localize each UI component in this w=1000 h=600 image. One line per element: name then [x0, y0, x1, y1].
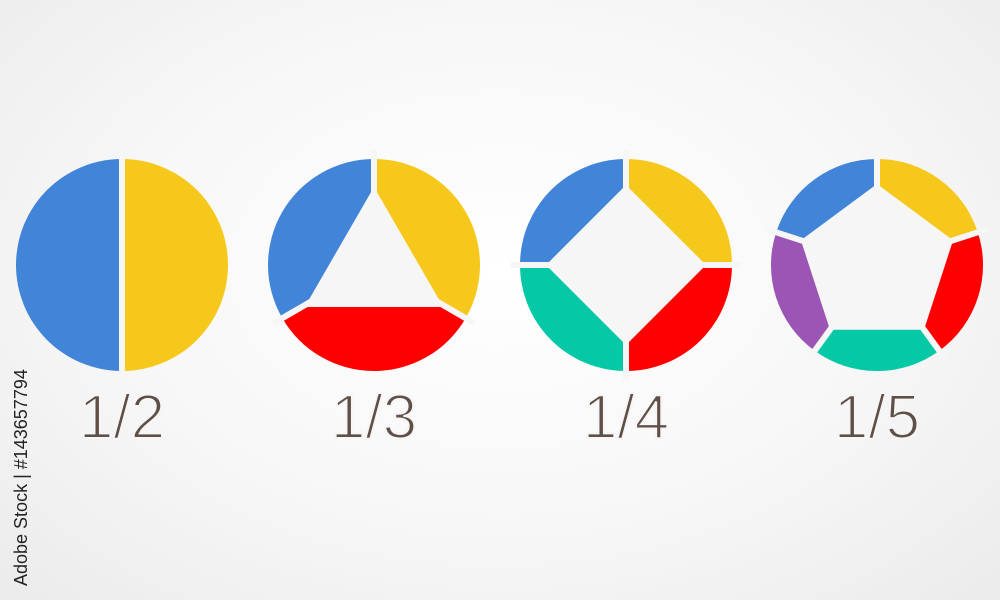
label: 1/2: 1/2	[79, 383, 165, 452]
chart: one quarter	[511, 150, 741, 380]
label: 1/4: 1/4	[583, 383, 669, 452]
label: 1/3: 1/3	[331, 383, 417, 452]
chart: one fifth	[767, 150, 987, 371]
label: 1/5: 1/5	[834, 383, 920, 452]
watermark id vertical text: Adobe Stock | #143657794	[11, 369, 31, 586]
chart: one half	[16, 150, 228, 380]
chart: one third	[268, 150, 480, 371]
